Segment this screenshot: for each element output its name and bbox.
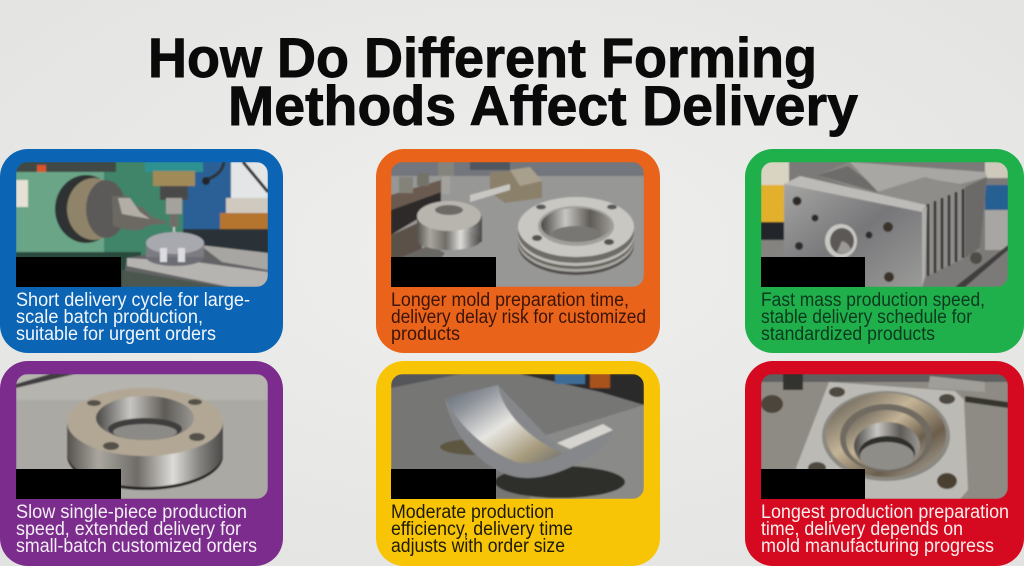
description text: Longest production preparation [761, 502, 1009, 523]
description text: stable delivery schedule for [761, 307, 973, 328]
description text [761, 502, 1009, 557]
description text: Longer mold preparation time, [391, 290, 629, 311]
title [148, 26, 858, 137]
title: Methods Affect Delivery [228, 74, 858, 137]
description text: suitable for urgent orders [16, 324, 216, 345]
description text: Slow single-piece production [16, 502, 247, 523]
redacted label block [391, 257, 496, 287]
description text [16, 502, 257, 557]
photo: machined ring and cylinder [391, 162, 644, 287]
redacted label block [761, 469, 865, 499]
description text: Fast mass production speed, [761, 290, 985, 311]
description text [761, 290, 985, 345]
description text: time, delivery depends on [761, 519, 963, 540]
panel: moderate production efficiency (yellow) [376, 361, 660, 566]
photo: milling machine [16, 162, 268, 287]
description text: products [391, 324, 460, 345]
description text [391, 502, 573, 557]
description text: standardized products [761, 324, 935, 345]
redacted label block [761, 257, 865, 287]
description text: delivery delay risk for customized [391, 307, 646, 328]
panel: slow single-piece production (purple) [0, 361, 283, 566]
description text: scale batch production, [16, 307, 203, 328]
title: How Do Different Forming [148, 26, 817, 89]
photo: flat metal ring [16, 374, 268, 499]
photo: square flange [761, 374, 1008, 499]
panel: fast mass production (green) [745, 149, 1024, 353]
description text: Short delivery cycle for large- [16, 290, 250, 311]
description text: adjusts with order size [391, 536, 565, 557]
description text [16, 290, 250, 345]
description text: speed, extended delivery for [16, 519, 242, 540]
description text [391, 290, 646, 345]
description text: small-batch customized orders [16, 536, 257, 557]
description text: efficiency, delivery time [391, 519, 573, 540]
photo: curved metal part [391, 374, 644, 499]
panel: longer mold preparation (orange) [376, 149, 660, 353]
description text: mold manufacturing progress [761, 536, 994, 557]
panel: short delivery cycle (blue) [0, 149, 283, 353]
redacted label block [16, 469, 121, 499]
photo: finned metal block [761, 162, 1008, 287]
redacted label block [391, 469, 496, 499]
description text: Moderate production [391, 502, 554, 523]
redacted label block [16, 257, 121, 287]
panel: longest preparation time (red) [745, 361, 1024, 566]
